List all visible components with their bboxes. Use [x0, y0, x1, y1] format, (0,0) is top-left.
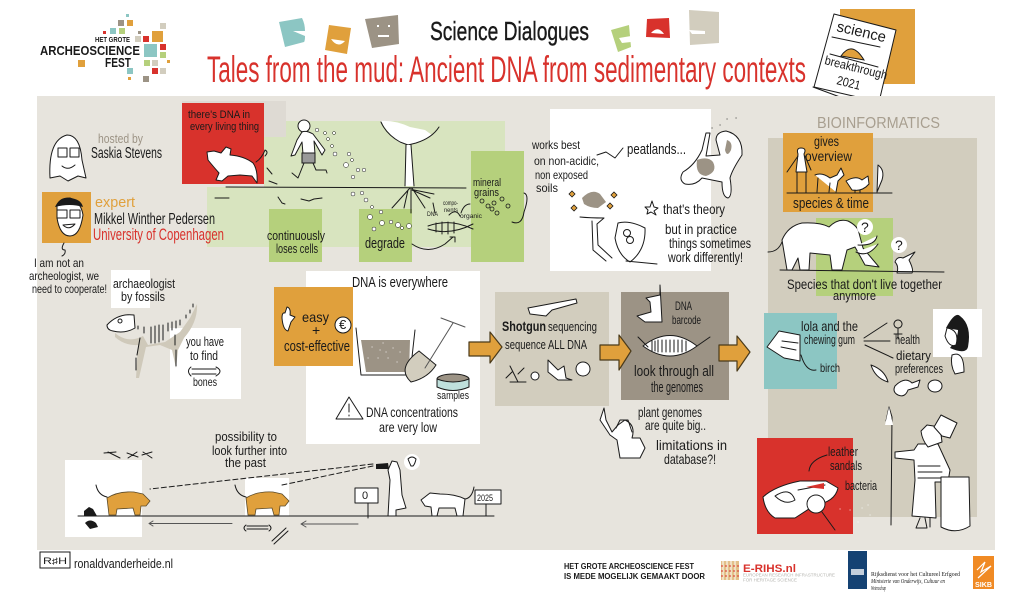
panel: species that don't live together: anymore	[833, 288, 876, 303]
icons: plant, bug, bird	[506, 360, 590, 382]
logo: Rijksdienst: Rijksdienst voor het Cultureel Erfgoed	[871, 571, 960, 578]
plant genomes note: are quite big..	[645, 417, 706, 433]
footer text: IS MEDE MOGELIJK GEMAAKT DOOR	[564, 572, 705, 581]
panel: Lola and the chewing gum: dietary	[896, 348, 931, 363]
icon: microscope	[637, 285, 662, 322]
timeline: possibility to look further into the past	[65, 429, 501, 544]
icons: food	[871, 365, 942, 396]
expert: Mikkel Winther Pedersen: expert	[95, 194, 136, 211]
icon: shovel	[405, 318, 465, 382]
heading: Science Dialogues: Science Dialogues	[430, 16, 589, 46]
logo: SIKB: SIKB	[975, 582, 992, 589]
arrow 2	[600, 335, 631, 370]
logo: Het Grote Archeoscience Fest: HET GROTE	[95, 35, 130, 44]
panel: peatlands: non exposed	[535, 168, 588, 182]
plant genomes note: plant genomes	[638, 404, 702, 420]
panel: species that don't live together: ?	[895, 237, 903, 253]
callout: gives overview: species & time	[793, 195, 869, 212]
icon: sandal	[763, 481, 838, 518]
panel: there is DNA in every living thing: mineral	[473, 177, 501, 189]
DNA cells	[267, 128, 412, 231]
plant genomes note	[600, 404, 727, 467]
main background panel	[37, 96, 995, 550]
host: Saskia Stevens: hosted by	[98, 131, 143, 146]
icon: pig	[207, 147, 257, 183]
callout: easy and cost-effective: cost-effective	[284, 338, 350, 355]
panel: DNA is everywhere: DNA is everywhere	[352, 274, 448, 291]
badge: Science breakthrough 2021	[813, 9, 915, 110]
logo: E-RIHS: EUROPEAN RESEARCH INFRASTRUCTURE	[743, 572, 835, 578]
icon: thinking person	[600, 408, 645, 458]
quote: cooperate	[29, 256, 107, 296]
icon: birds	[104, 452, 152, 458]
plant genomes note: database?!	[664, 451, 716, 467]
icon: Lola portrait	[945, 315, 969, 374]
icon: tree	[381, 121, 439, 213]
icon: soil clumps	[84, 507, 98, 529]
callout: easy and cost-effective: easy	[302, 309, 329, 325]
panel: there is DNA in every living thing: degrade	[365, 235, 405, 252]
icon: warning triangle	[336, 397, 363, 419]
icon: female symbol	[894, 320, 902, 339]
credit: ronaldvanderheide.nl	[40, 552, 173, 571]
panel: there is DNA in every living thing: nents	[444, 208, 458, 214]
host: Saskia Stevens: Saskia Stevens	[91, 145, 162, 162]
icon: Roman soldier	[885, 407, 970, 531]
panel: there is DNA in every living thing: DNA	[427, 212, 438, 218]
expert: Mikkel Winther Pedersen	[42, 192, 224, 256]
logo: Het Grote Archeoscience Fest	[40, 14, 170, 82]
panel: peatlands: but in practice	[665, 221, 737, 237]
speech faces left	[279, 15, 399, 54]
icon: bucket of soil	[356, 328, 415, 375]
icon: walking person	[291, 120, 327, 178]
panel: Lola and the chewing gum: preferences	[895, 361, 943, 376]
icon: rabbit	[895, 252, 915, 273]
icon: barcode in DNA	[638, 336, 710, 356]
callout: gives overview: overview	[805, 148, 853, 164]
icon: shotgun	[528, 299, 577, 316]
callout: gives overview: gives	[814, 133, 839, 149]
panel: shotgun sequencing	[495, 292, 609, 406]
arrow 3	[719, 336, 750, 371]
panel: Lola and the chewing gum: health	[895, 332, 920, 347]
quote: cooperate: archeologist, we	[29, 269, 99, 283]
icon: sample dish	[437, 0, 951, 390]
panel: peatlands: peatlands...	[627, 141, 686, 158]
icon: white pig	[421, 487, 474, 516]
panel: species that don't live together: ?	[861, 219, 869, 235]
panel: peatlands: works best	[531, 138, 581, 152]
logo: SIKB	[973, 556, 994, 589]
expert: Mikkel Winther Pedersen: Mikkel Winther Pedersen	[94, 211, 215, 228]
arrows along timeline	[149, 521, 358, 527]
panel: species that don't live together	[768, 218, 944, 303]
panel: DNA barcode	[621, 285, 729, 400]
panel: shotgun sequencing: sequencing	[548, 319, 597, 334]
signpost 0: 0	[362, 490, 368, 502]
panel: there is DNA in every living thing: continuously	[267, 228, 325, 243]
icon: bones	[244, 525, 288, 544]
panel: DNA barcode: DNA	[675, 299, 692, 313]
panel: shotgun sequencing: sequence ALL DNA	[505, 337, 587, 352]
panel: DNA is everywhere: DNA concentrations	[366, 404, 458, 420]
callout: easy and cost-effective	[274, 287, 353, 366]
badge: Science breakthrough 2021: breakthrough	[823, 53, 889, 82]
arrow 1	[469, 332, 502, 363]
speech faces right	[611, 10, 719, 52]
callout: easy and cost-effective: +	[312, 322, 320, 338]
panel: there is DNA in every living thing: loses cells	[276, 241, 318, 256]
panel: archaeologist by fossils: to find	[190, 348, 218, 363]
panel: peatlands	[531, 109, 751, 271]
panel: archaeologist by fossils	[107, 270, 241, 399]
plant genomes note: limitations in	[656, 437, 727, 453]
logo: Rijksdienst: Ministerie van Onderwijs, Cultuur en	[870, 579, 945, 585]
footer text	[564, 562, 705, 581]
timeline: possibility to look further into the past: look further into	[212, 443, 287, 458]
icon: orange pig 1	[96, 485, 150, 515]
icon: soil with sparkles	[569, 191, 617, 211]
logo: Het Grote Archeoscience Fest: FEST	[105, 56, 131, 70]
badge: Science breakthrough 2021: 2021	[835, 73, 862, 93]
host: Saskia Stevens	[50, 131, 162, 181]
credit: ronaldvanderheide.nl: R♯H	[43, 556, 67, 566]
logo: E-RIHS: FOR HERITAGE SCIENCE	[743, 578, 797, 582]
panel: Lola and the chewing gum	[764, 309, 982, 396]
dashed sight lines	[150, 464, 373, 489]
icon: magnifier	[807, 495, 825, 513]
panel: DNA is everywhere: are very low	[379, 419, 438, 435]
panel: peatlands: soils	[536, 181, 558, 195]
panel: leather sandals	[757, 438, 878, 534]
panel: there is DNA in every living thing: compo-	[443, 201, 458, 207]
panel: species that don't live together: Species that don't live together	[787, 276, 942, 292]
expert: Mikkel Winther Pedersen: University of Copenhagen	[93, 225, 224, 244]
panel: leather sandals: leather	[828, 444, 859, 459]
credit: ronaldvanderheide.nl: ronaldvanderheide.nl	[74, 556, 173, 571]
panel: DNA barcode: look through all	[634, 363, 714, 380]
quote: cooperate: I am not an	[34, 256, 84, 270]
panel: archaeologist by fossils: you have	[186, 334, 224, 349]
panel: DNA barcode: the genomes	[651, 379, 703, 396]
panel: there is DNA in every living thing: grains	[474, 187, 499, 199]
ground line	[226, 187, 466, 188]
icon: orange pig 2	[235, 485, 289, 515]
panel: peatlands: that's theory	[663, 201, 725, 217]
panel: peatlands: on non-acidic,	[534, 154, 599, 168]
panel: there is DNA in every living thing: organic	[460, 214, 482, 220]
panel: there is DNA in every living thing	[182, 101, 527, 262]
icon: bone	[188, 367, 220, 376]
icon: mammoth	[782, 220, 879, 270]
panel: DNA barcode: barcode	[672, 313, 701, 327]
timeline: possibility to look further into the past: possibility to	[215, 429, 277, 444]
icon: star	[645, 201, 658, 215]
logo: E-RIHS	[721, 561, 835, 582]
panel: Lola and the chewing gum: lola and the	[801, 318, 858, 334]
icon: person with hand up	[580, 217, 657, 264]
signpost 0	[355, 488, 378, 518]
callout: easy and cost-effective: €	[339, 317, 347, 332]
signpost 2025	[475, 490, 501, 516]
icon: birch gum	[767, 331, 800, 361]
timeline: possibility to look further into the past: the past	[225, 455, 266, 470]
panel: Lola and the chewing gum: chewing gum	[804, 332, 855, 347]
footer text: HET GROTE ARCHEOSCIENCE FEST	[564, 562, 694, 571]
heading: Bioinformatics: BIOINFORMATICS	[817, 115, 940, 132]
panel: DNA is everywhere	[274, 0, 951, 444]
logo: Rijksdienst	[848, 551, 960, 592]
panel: archaeologist by fossils: bones	[193, 375, 217, 389]
icon: fossil skeleton	[107, 304, 197, 378]
quote: cooperate: need to cooperate!	[32, 282, 107, 296]
panel: peatlands: things sometimes	[669, 235, 751, 251]
panel: leather sandals: bacteria	[845, 478, 878, 493]
signpost 2025: 2025	[477, 493, 493, 503]
badge: Science breakthrough 2021: science	[835, 18, 888, 46]
panel: peatlands: work differently!	[667, 249, 743, 265]
panel: bioinformatics	[757, 133, 982, 534]
panel: archaeologist by fossils: archaeologist	[113, 276, 175, 291]
icon: scientist with telescope	[376, 454, 420, 516]
logo: E-RIHS: E-RIHS.nl	[743, 563, 796, 575]
panel: leather sandals: sandals	[830, 458, 862, 473]
panel: DNA is everywhere: samples	[437, 390, 469, 402]
icon: question marks	[857, 219, 873, 235]
logo: Het Grote Archeoscience Fest: ARCHEOSCIENCE	[40, 44, 140, 58]
panel: shotgun sequencing: Shotgun	[502, 318, 546, 334]
mineral grains	[480, 197, 510, 215]
panel: Lola and the chewing gum: birch	[820, 361, 840, 375]
panel: there is DNA in every living thing: there's DNA in	[188, 109, 250, 121]
logo: Rijksdienst: Wetenschap	[871, 586, 886, 592]
callout: gives overview	[783, 133, 892, 212]
panel: archaeologist by fossils: by fossils	[121, 289, 165, 304]
icon: DNA helix	[428, 222, 473, 234]
icon: peatland map	[681, 118, 742, 198]
panel: there is DNA in every living thing: every living thing	[190, 121, 259, 133]
